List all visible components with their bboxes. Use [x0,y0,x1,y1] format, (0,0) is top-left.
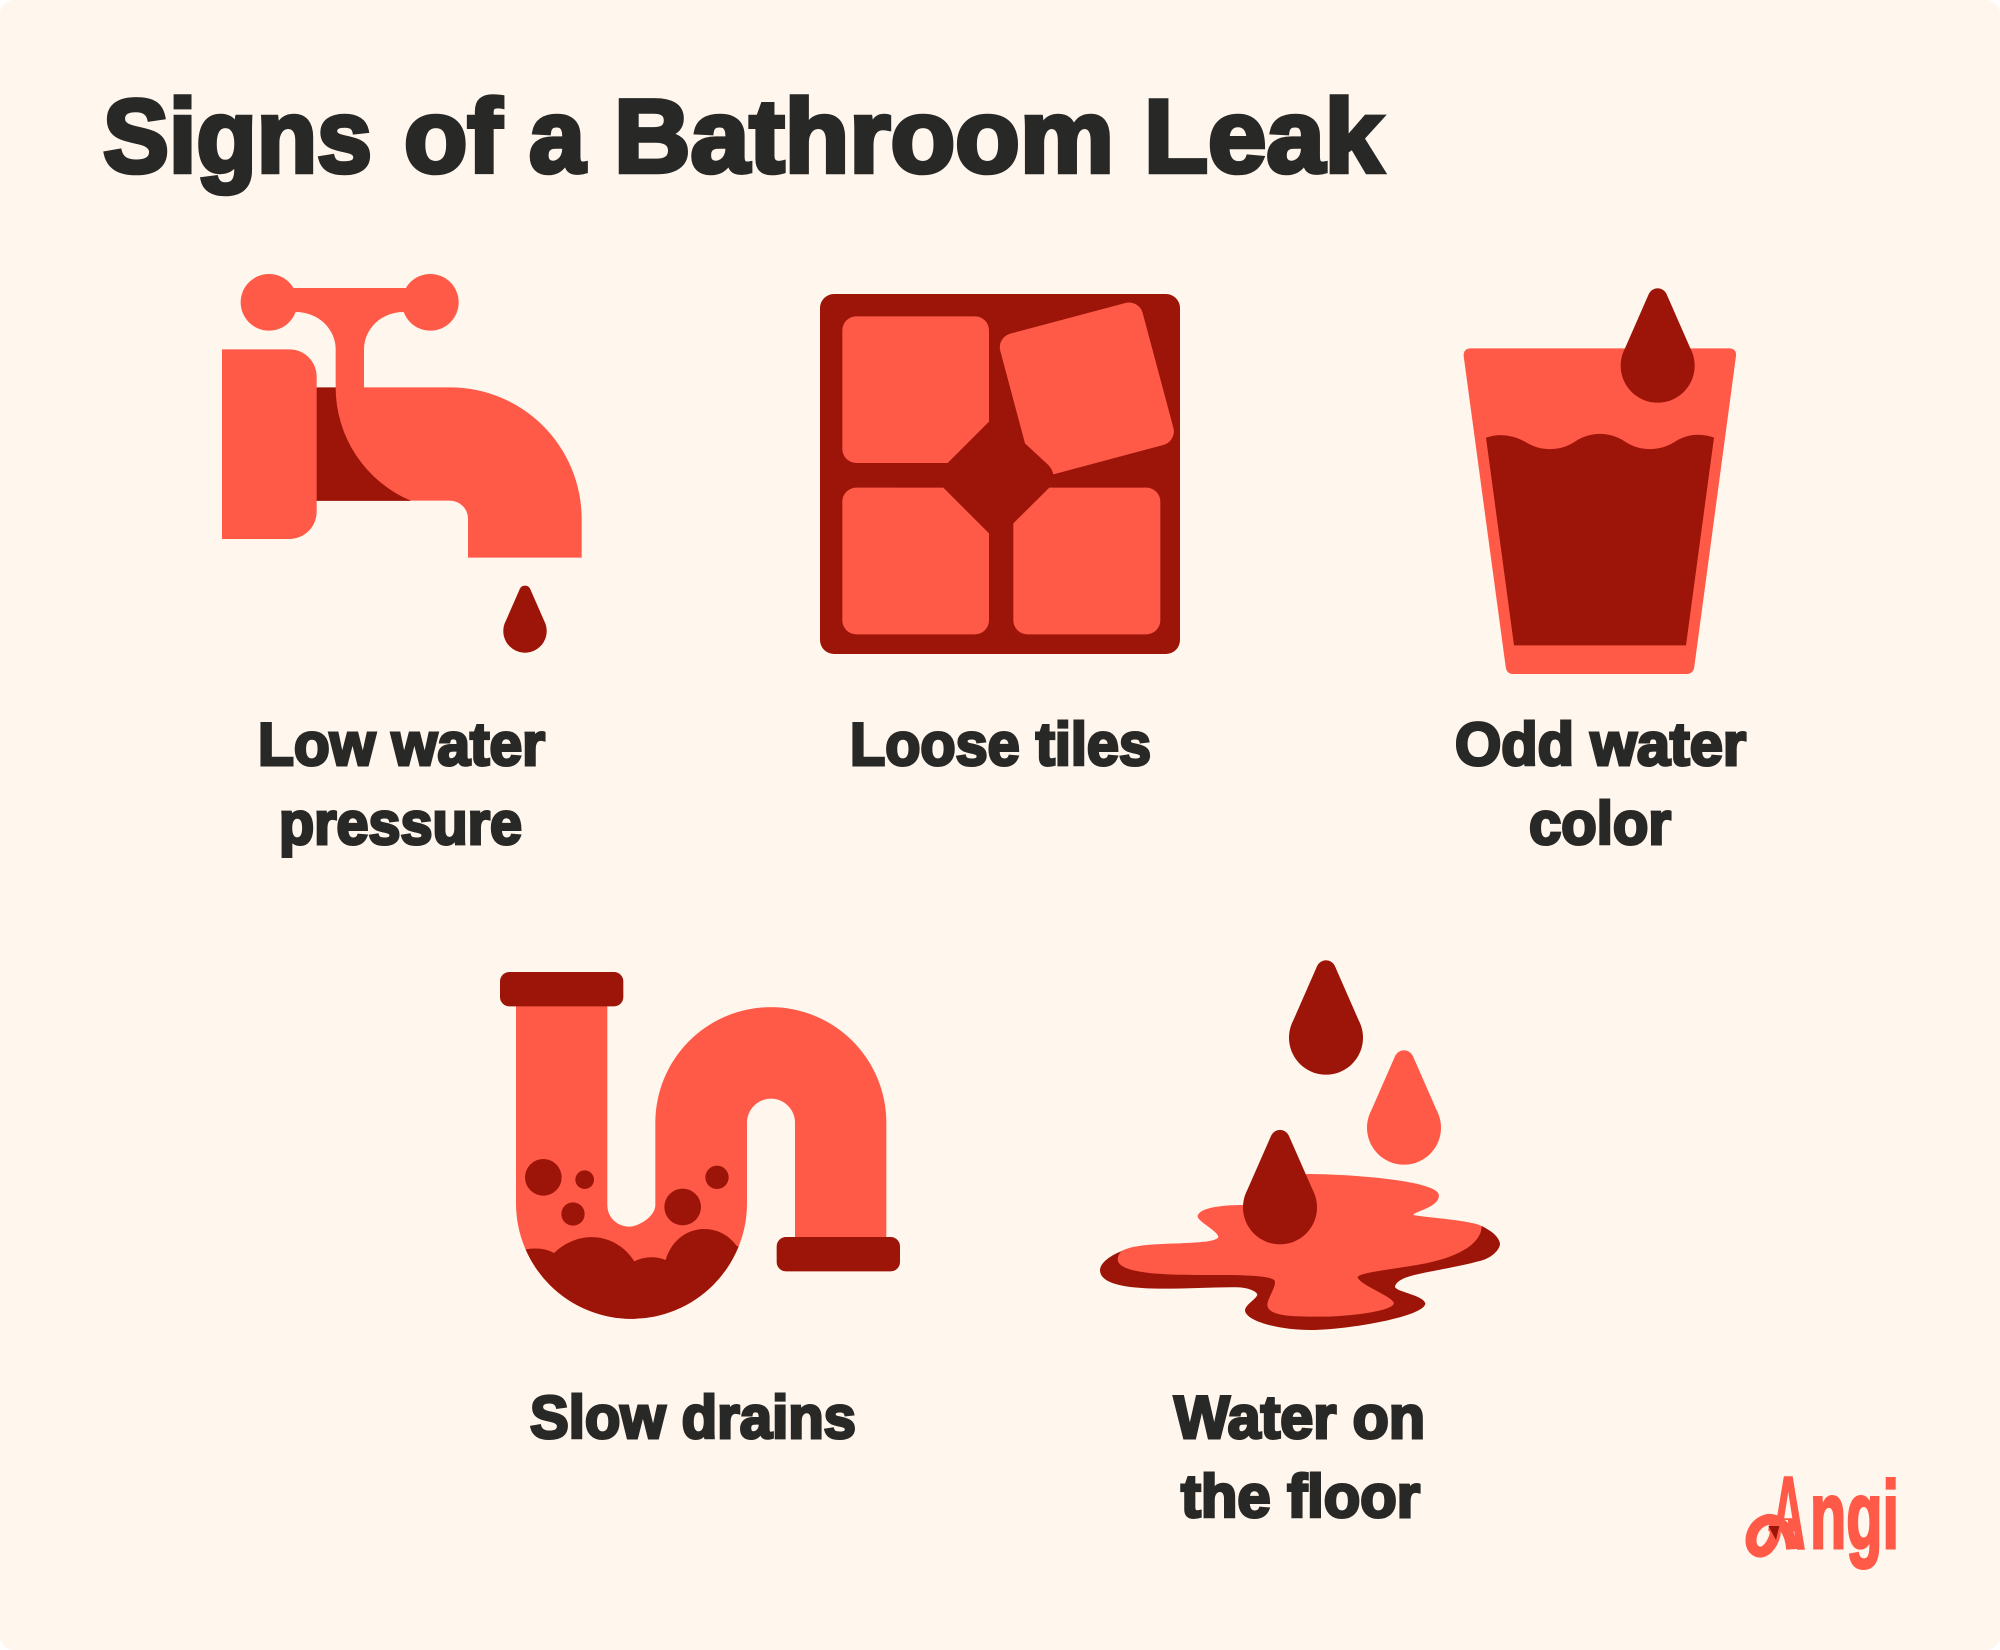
label: low water pressure [258,711,545,857]
label: low water pressure: pressure [279,790,522,857]
label: odd water color [1455,711,1746,857]
title [103,79,1383,195]
title: a [529,79,586,195]
icon: faucet [222,274,582,653]
title: Signs [103,79,372,195]
icon: clogged pipe [500,972,900,1333]
logo: Angi [1746,1476,1896,1570]
label: odd water color: Odd water [1455,711,1746,778]
logo: Angi: ngi [1810,1462,1899,1569]
label: low water pressure: Low water [258,711,545,778]
label: slow drains: Slow drains [530,1384,856,1451]
logo: Angi: A [1771,1456,1806,1572]
label: odd water color: color [1529,790,1671,857]
label: loose tiles: Loose tiles [850,711,1151,778]
label: water on the floor: the floor [1181,1463,1420,1530]
label: water on the floor: Water on [1174,1384,1425,1451]
title: of [404,79,502,195]
icon: glass of water [1464,288,1736,674]
title: Bathroom [614,79,1114,195]
title: Leak [1144,79,1383,195]
icon: falling drop [503,586,547,653]
label: water on the floor [1174,1384,1425,1530]
icon: water puddle with drops [1100,960,1500,1330]
icon: loose tiles [820,294,1180,654]
